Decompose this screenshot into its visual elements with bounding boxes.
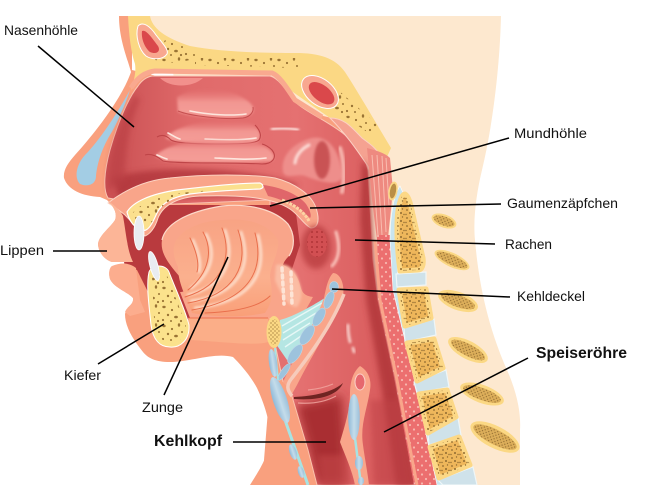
arytenoid column <box>340 366 370 485</box>
label: Zunge <box>142 257 228 415</box>
label: Zunge: Zunge <box>142 399 183 415</box>
nasal turbinates <box>145 78 274 164</box>
thyroid and tracheal cartilage <box>266 348 308 485</box>
mucosa ridge near skull base <box>330 118 379 172</box>
label: Speiseröhre: Speiseröhre <box>536 345 627 362</box>
yellow skull bone <box>128 16 391 157</box>
tongue base lumps <box>275 264 301 307</box>
cream neck and head background <box>145 16 520 485</box>
spine ligament blue band <box>390 186 449 485</box>
label: Mundhöhle <box>270 125 587 206</box>
hard and soft palate <box>108 175 318 236</box>
label: Mundhöhle: Mundhöhle <box>514 125 587 141</box>
eustachian tube opening <box>272 128 344 192</box>
back wall shadow <box>360 160 414 485</box>
vertebral discs <box>396 272 477 485</box>
label: Kehldeckel: Kehldeckel <box>517 288 585 304</box>
label: Lippen <box>0 242 107 258</box>
pharynx highlight <box>348 325 354 352</box>
palate bone <box>127 183 263 230</box>
nasal floor shadow <box>112 169 300 200</box>
upper airway salmon mucosa band <box>131 71 322 117</box>
label: Rachen: Rachen <box>505 236 552 252</box>
spinous processes <box>430 210 524 459</box>
nasal cavity and pharynx <box>105 76 415 485</box>
mouth interior dark red <box>121 205 300 320</box>
uvula <box>282 200 309 221</box>
tonsil <box>301 225 339 269</box>
anterior neck tissue beside larynx <box>262 382 317 485</box>
label: Nasenhöhle: Nasenhöhle <box>4 22 78 38</box>
hyoid ligament fan <box>276 296 328 360</box>
mouth floor <box>188 318 268 344</box>
jaw bone <box>148 266 189 347</box>
label: Rachen <box>355 236 552 252</box>
label: Lippen: Lippen <box>0 242 44 258</box>
back wall muscle <box>367 148 393 240</box>
esophagus wall <box>375 235 437 485</box>
vertebra speckles <box>397 194 470 478</box>
label: Kehldeckel <box>332 288 585 304</box>
label: Gaumenzäpfchen <box>310 195 618 211</box>
label: Kiefer: Kiefer <box>64 367 101 383</box>
epiglottis <box>276 273 344 396</box>
label: Nasenhöhle <box>4 22 134 127</box>
tongue <box>162 205 313 344</box>
skin of head and neck <box>64 16 370 485</box>
hyoid bone <box>266 316 282 348</box>
label: Kehlkopf: Kehlkopf <box>154 433 223 450</box>
vertebrae <box>397 194 470 478</box>
tongue muscle fibres <box>188 230 261 308</box>
vocal fold <box>294 383 343 399</box>
label: Gaumenzäpfchen: Gaumenzäpfchen <box>507 195 618 211</box>
epiglottis cartilage <box>276 282 338 382</box>
larynx cavity shading <box>294 383 412 485</box>
sphenoid sinus <box>295 69 345 115</box>
atlas bone <box>387 181 399 201</box>
bone speckles <box>155 40 200 63</box>
nasal left shadow <box>108 95 140 190</box>
soft palate muscle <box>263 185 311 218</box>
label: Kiefer <box>64 324 164 383</box>
nasal cartilage <box>77 90 130 185</box>
frontal sinus <box>137 24 167 59</box>
lower tooth <box>146 250 162 282</box>
lips <box>98 200 145 316</box>
upper tooth <box>134 216 144 250</box>
label: Speiseröhre <box>384 345 627 432</box>
